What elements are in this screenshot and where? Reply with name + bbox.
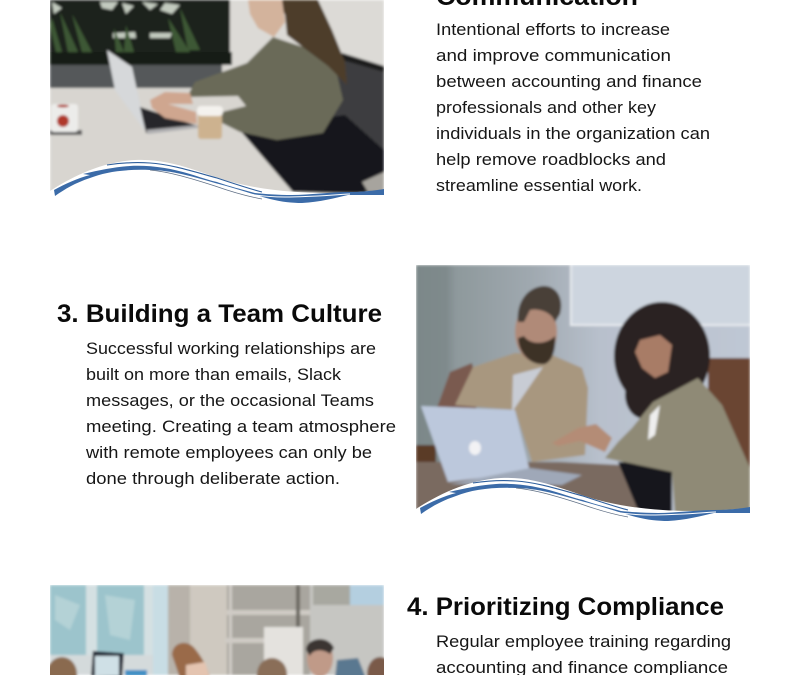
photo: woman typing on a laptop xyxy=(50,0,384,200)
section 2 body text: between accounting and finance xyxy=(436,72,702,91)
section 3 body text: built on more than emails, Slack xyxy=(86,365,342,384)
section 4 heading: 4. Prioritizing Compliance xyxy=(407,593,724,621)
section 2 body text: Intentional efforts to increase xyxy=(436,20,670,39)
section 4 body text: Regular employee training regarding xyxy=(436,632,731,651)
section 2 body text: streamline essential work. xyxy=(436,176,642,195)
section 2 body text: and improve communication xyxy=(436,46,671,65)
photo: man and woman at a laptop xyxy=(416,265,750,525)
section 2 body text xyxy=(436,20,710,195)
section 3 body text: done through deliberate action. xyxy=(86,469,340,488)
decorative wave: photo 1 xyxy=(50,160,384,212)
decorative wave: photo 2 xyxy=(416,478,750,530)
section 3 body text: meeting. Creating a team atmosphere xyxy=(86,417,396,436)
section 3 body text: Successful working relationships are xyxy=(86,339,376,358)
section 4 body text xyxy=(436,632,731,675)
section 2 body text: individuals in the organization can xyxy=(436,124,710,143)
section 2 body text: help remove roadblocks and xyxy=(436,150,666,169)
section 3 heading: 3. Building a Team Culture xyxy=(57,300,382,328)
section 3 body text: messages, or the occasional Teams xyxy=(86,391,374,410)
photo: team in an office xyxy=(47,585,393,675)
section 3 body text: with remote employees can only be xyxy=(85,443,372,462)
section 2 body text: professionals and other key xyxy=(436,98,657,117)
section 3 body text xyxy=(85,339,396,488)
